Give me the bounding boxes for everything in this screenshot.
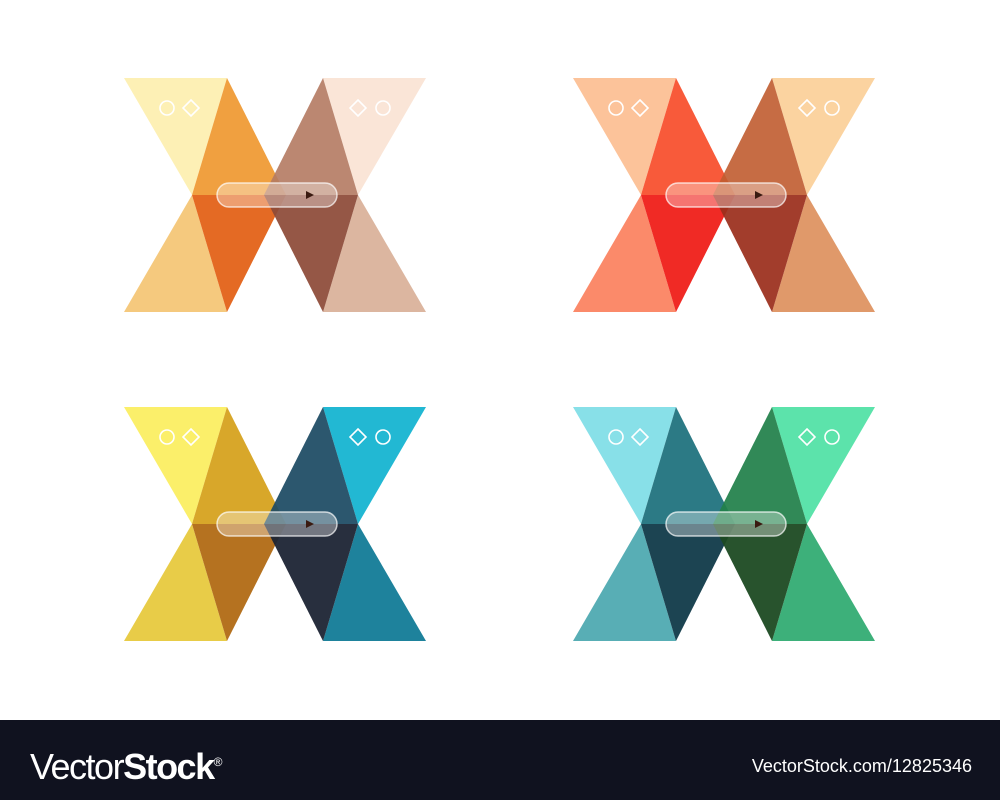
footer url: VectorStock.com/12825346 <box>752 756 972 776</box>
X shape: red/brown <box>573 78 875 312</box>
footer logo: VectorStock® <box>30 746 221 787</box>
X shape: yellow/navy <box>124 407 426 641</box>
X shape: teal/green <box>573 407 875 641</box>
X shape: orange/brown <box>124 78 426 312</box>
footer bar <box>0 720 1000 800</box>
